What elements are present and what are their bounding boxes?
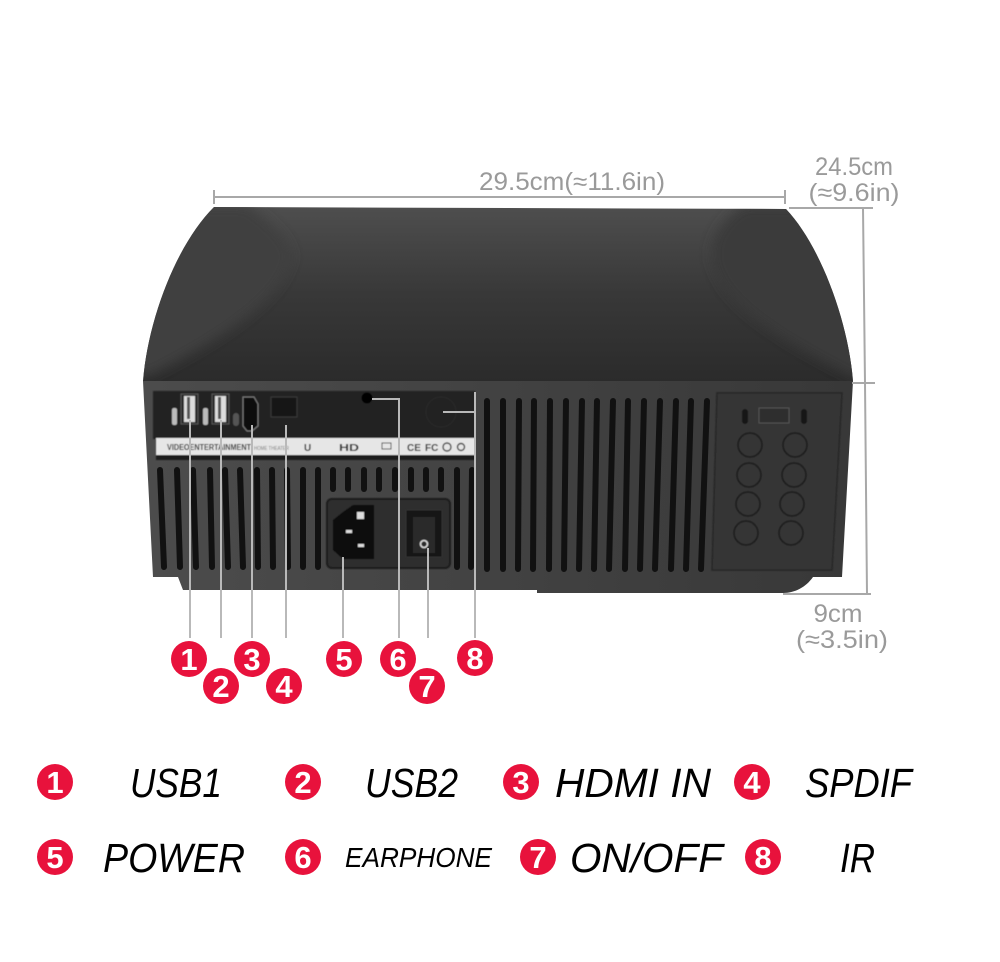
dimension: height: 9cm <box>814 600 862 628</box>
callout numbers on the photo <box>171 640 493 704</box>
legend item 2: USB2 <box>365 760 458 806</box>
callout 5: 5 <box>335 642 353 677</box>
callout 8: 8 <box>466 641 484 676</box>
rear face <box>143 381 853 593</box>
USB ports <box>172 394 239 426</box>
callout 6: 6 <box>389 642 407 677</box>
legend item 7: 7 <box>529 840 547 875</box>
SPDIF port <box>271 397 297 417</box>
dimension: height <box>783 383 888 654</box>
port panel <box>153 391 475 460</box>
projector body <box>130 205 870 593</box>
IR window <box>426 397 456 427</box>
legend item 8 <box>745 835 875 881</box>
callout 3: 3 <box>243 642 261 677</box>
dimension: width <box>214 168 785 204</box>
legend item 7: ON/OFF <box>570 835 725 881</box>
legend item 8: 8 <box>754 840 772 875</box>
right vents <box>487 401 707 569</box>
top shell <box>130 205 870 381</box>
dimension: height: (≈3.5in) <box>796 626 888 654</box>
label strip: HOME THEATER <box>254 446 289 452</box>
buttons <box>734 433 807 545</box>
dimension: depth: 24.5cm <box>815 153 893 181</box>
callout 1 <box>171 641 207 677</box>
callout 2 <box>203 668 239 704</box>
dimension: width: 29.5cm(≈11.6in) <box>479 168 665 196</box>
callout 7: 7 <box>418 669 436 704</box>
legend item 4: SPDIF <box>805 760 914 806</box>
label strip: CE <box>407 443 421 454</box>
legend item 5 <box>37 835 245 881</box>
legend item 3: HDMI IN <box>555 760 711 806</box>
label strip: FC <box>425 443 438 454</box>
callout 1: 1 <box>180 642 198 677</box>
callout 2: 2 <box>212 669 230 704</box>
power switch <box>406 510 442 557</box>
legend item 6 <box>285 839 492 875</box>
legend item 3: 3 <box>512 765 530 800</box>
callout 6 <box>380 641 416 677</box>
legend item 2 <box>285 760 458 806</box>
legend item 6: 6 <box>294 840 312 875</box>
callout 5 <box>326 641 362 677</box>
legend <box>37 760 914 881</box>
HDMI port <box>243 397 258 431</box>
callout 7 <box>409 668 445 704</box>
legend item 4 <box>734 760 914 806</box>
legend item 8: IR <box>840 835 875 881</box>
callout 3 <box>234 641 270 677</box>
legend item 5: 5 <box>46 840 64 875</box>
legend item 1 <box>37 760 222 806</box>
label strip <box>156 438 475 460</box>
lower-left vents <box>160 470 472 567</box>
power socket <box>327 499 450 568</box>
legend item 1: USB1 <box>130 760 222 806</box>
indicator lights <box>742 409 748 424</box>
earphone jack <box>362 392 372 404</box>
dimension: depth: (≈9.6in) <box>808 179 900 207</box>
label strip: HD <box>339 443 359 454</box>
infographic canvas <box>37 157 914 875</box>
dimension: depth <box>789 153 900 383</box>
label strip: U <box>304 443 311 454</box>
callout 4 <box>266 668 302 704</box>
label strip: VIDEOENTERTAINMENT <box>167 443 251 452</box>
leader lines <box>190 392 475 638</box>
legend item 4: 4 <box>743 765 761 800</box>
legend item 5: POWER <box>103 835 245 881</box>
legend item 1: 1 <box>46 765 64 800</box>
legend item 2: 2 <box>294 765 312 800</box>
legend item 6: EARPHONE <box>345 842 492 873</box>
callout 8 <box>457 640 493 676</box>
callout 4: 4 <box>275 669 293 704</box>
control panel <box>712 393 842 570</box>
